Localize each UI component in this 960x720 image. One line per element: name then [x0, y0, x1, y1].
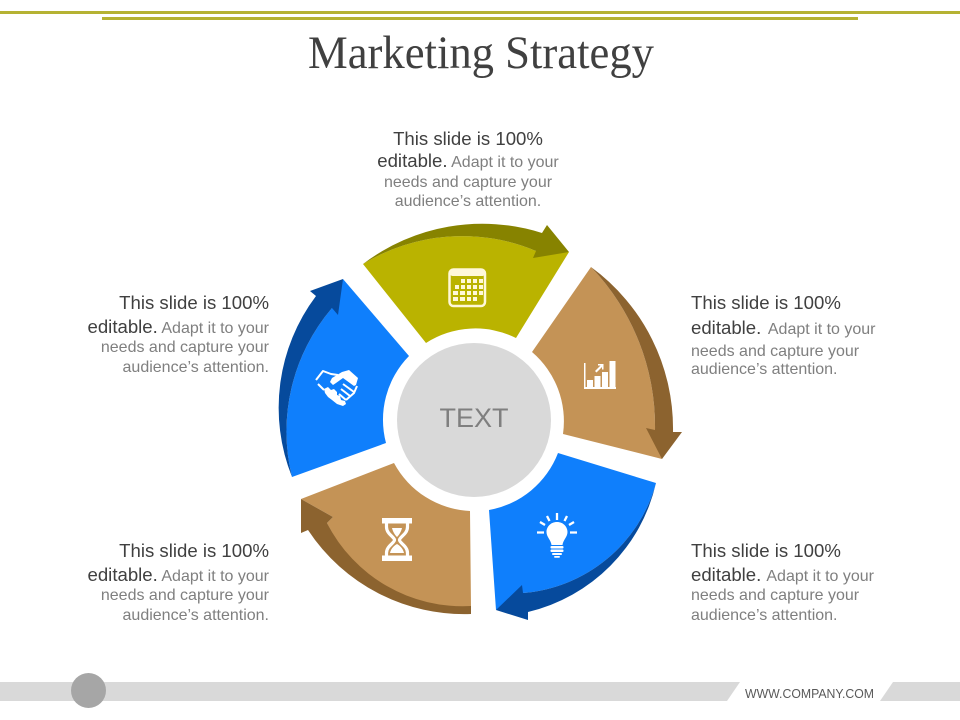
footer url: WWW.COMPANY.COM	[745, 687, 874, 701]
text block: left: This slide is 100%	[119, 292, 269, 313]
segment: olive arrow	[363, 224, 569, 343]
text block: top: editable. Adapt it to your	[377, 150, 559, 171]
segment: tan arrow bottom left	[301, 463, 471, 614]
text block: left	[88, 292, 270, 376]
text block: top: needs and capture your	[384, 174, 553, 191]
text block: bottom right: needs and capture your	[691, 587, 860, 604]
segment: tan arrow right	[532, 267, 682, 459]
text block: bottom left: audience’s attention.	[123, 607, 269, 624]
text block: top	[377, 128, 559, 210]
text block: bottom left	[88, 540, 270, 624]
text block: bottom right	[691, 540, 875, 624]
text block: bottom right: audience’s attention.	[691, 607, 837, 624]
text block: bottom left: editable. Adapt it to your	[88, 564, 270, 585]
text block: right	[691, 292, 876, 378]
title: Marketing Strategy	[308, 27, 654, 79]
icon: handshake	[316, 370, 358, 406]
footer bar	[0, 682, 960, 701]
text block: left: editable. Adapt it to your	[88, 316, 270, 337]
icon: calendar	[450, 270, 485, 306]
text block: top: This slide is 100%	[393, 128, 543, 149]
text block: bottom left: needs and capture your	[101, 587, 270, 604]
text block: bottom right: This slide is 100%	[691, 540, 841, 561]
icon: bar chart	[584, 361, 616, 389]
text block: right: editable. Adapt it to your	[691, 317, 876, 338]
text block: right: This slide is 100%	[691, 292, 841, 313]
center circle	[397, 343, 551, 497]
center circle: TEXT	[439, 403, 509, 433]
icon: light bulb	[537, 513, 577, 558]
segment: blue arrow bottom right	[489, 453, 656, 620]
text block: top: audience’s attention.	[395, 193, 541, 210]
text block: left: needs and capture your	[101, 339, 270, 356]
text block: right: needs and capture your	[691, 343, 860, 360]
text block: bottom left: This slide is 100%	[119, 540, 269, 561]
text block: right: audience’s attention.	[691, 361, 837, 378]
footer circle	[71, 673, 106, 708]
text block: bottom right: editable. Adapt it to your	[691, 564, 875, 585]
segment: blue arrow left	[279, 279, 409, 477]
text block: left: audience’s attention.	[123, 359, 269, 376]
icon: hourglass	[382, 518, 412, 561]
